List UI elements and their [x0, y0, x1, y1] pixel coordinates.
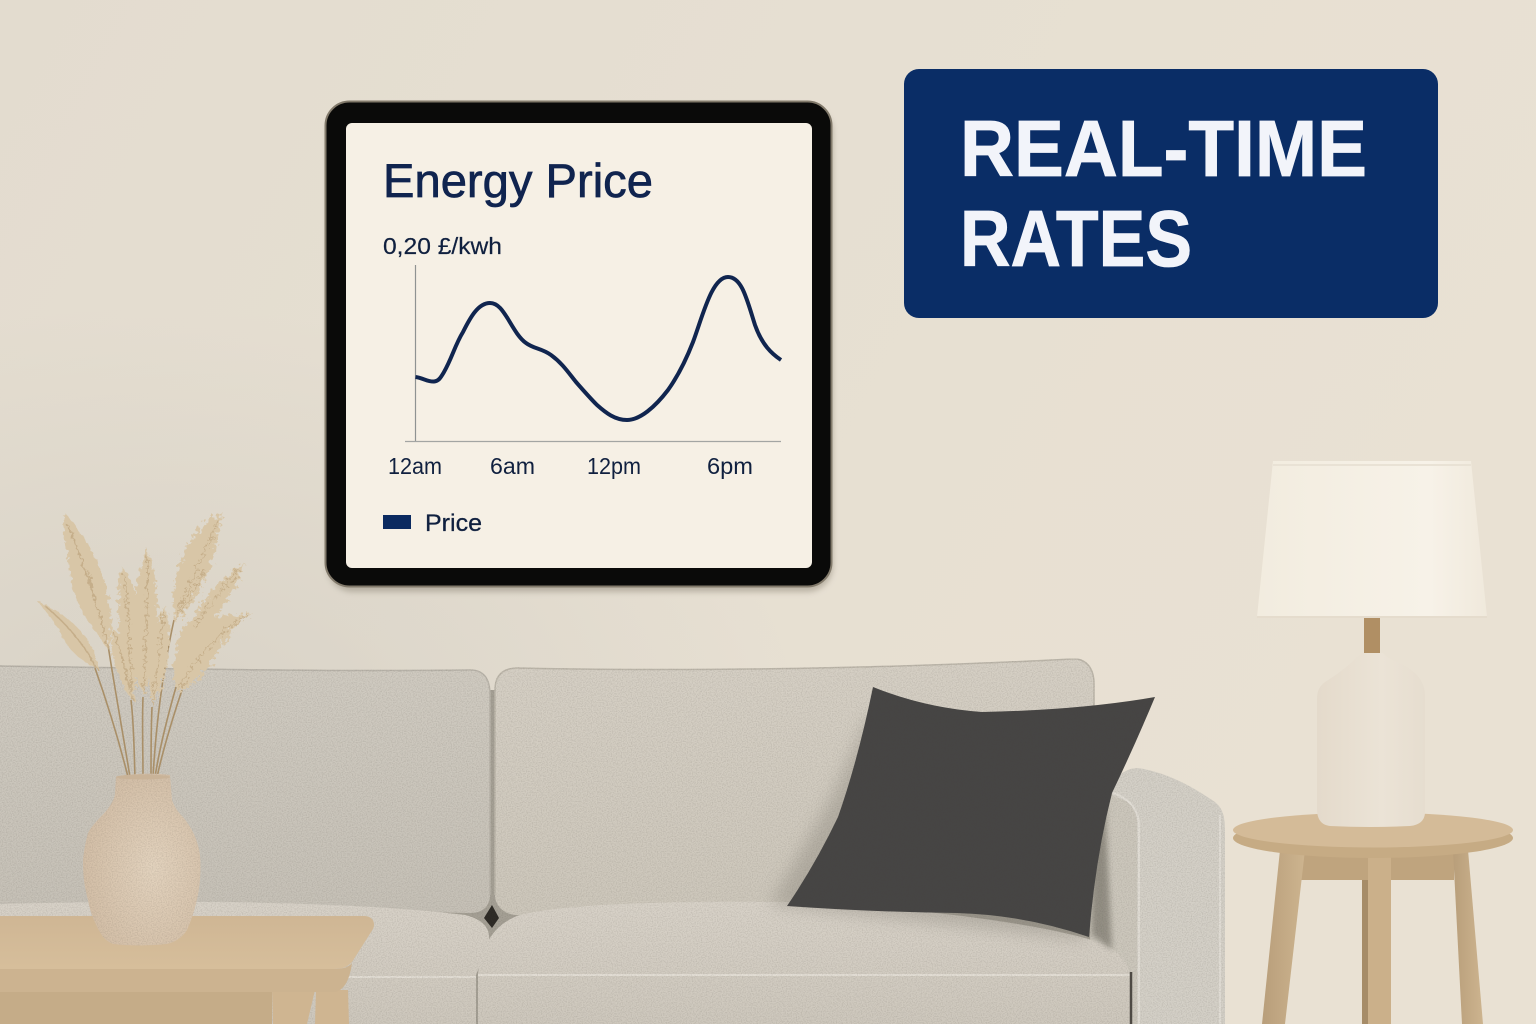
vase	[83, 774, 200, 946]
banner: real-time rates: RATES	[960, 194, 1192, 283]
grass stems	[95, 620, 182, 777]
side table right leg	[1453, 850, 1483, 1024]
tablet display	[326, 102, 833, 592]
side table apron	[1298, 852, 1454, 880]
side table top	[1233, 818, 1513, 858]
sofa	[0, 659, 1225, 1024]
tablet screen	[346, 123, 812, 568]
tablet bezel	[326, 102, 832, 586]
sofa left back cushion	[0, 666, 490, 913]
x axis labels: 6pm	[707, 453, 753, 479]
pampas grass	[38, 512, 253, 777]
sofa arm	[1090, 768, 1225, 1024]
price label: 0,20 £/kwh	[383, 233, 502, 259]
coffee table top	[0, 916, 374, 969]
x axis labels: 12am	[388, 453, 442, 479]
coffee table	[0, 916, 374, 1024]
banner: real-time rates: REAL-TIME	[960, 104, 1367, 193]
lamp stem	[1364, 617, 1380, 655]
x axis labels: 12pm	[587, 453, 641, 479]
grass plumes	[38, 512, 253, 707]
side table centre leg	[1368, 856, 1391, 1024]
side table back leg	[1362, 870, 1369, 1024]
throw pillow	[770, 687, 1155, 940]
sofa right seat cushion	[478, 902, 1130, 1024]
table lamp	[1257, 461, 1487, 827]
sofa frame backing	[0, 690, 1090, 1024]
side table	[1233, 812, 1513, 1024]
legend	[383, 510, 482, 537]
banner: real-time rates	[904, 69, 1438, 318]
coffee table apron	[0, 991, 272, 1024]
x axis labels	[388, 453, 753, 479]
sofa centre back cushion	[495, 659, 1094, 915]
sofa left seat cushion	[0, 902, 489, 1024]
legend: Price	[425, 510, 482, 537]
chart title: Energy Price	[383, 154, 653, 207]
coffee table legs	[272, 990, 349, 1024]
plume strands	[45, 520, 248, 705]
lamp base	[1317, 653, 1425, 827]
plume fills	[38, 512, 253, 707]
price line chart	[405, 265, 781, 442]
x axis labels: 6am	[490, 453, 535, 479]
sofa gap shadow	[484, 905, 499, 928]
side table left leg	[1262, 850, 1305, 1024]
lamp shade	[1257, 461, 1487, 617]
